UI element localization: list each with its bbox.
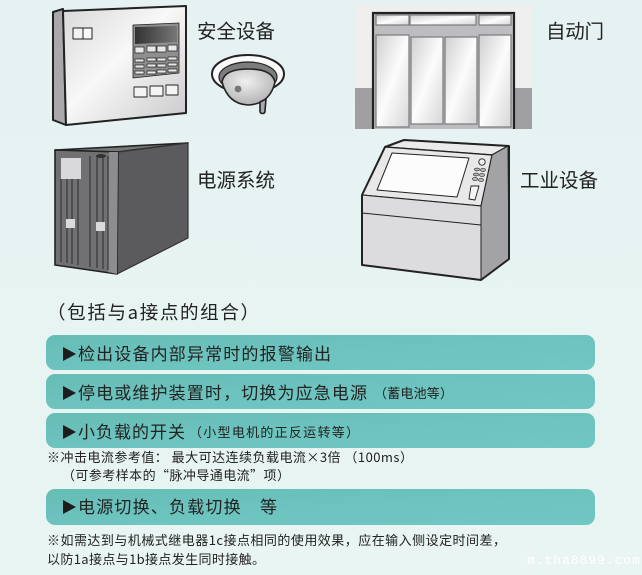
heading: 自动门: 自动门 <box>546 15 604 44</box>
note: 冲击电流: ※冲击电流参考值： 最大可达连续负载电流×3倍 （100ms） <box>47 447 413 466</box>
icon: automatic door <box>355 5 532 129</box>
bar: 小负载的开关: 小负载的开关 <box>78 418 185 443</box>
heading: 电源系统: 电源系统 <box>197 164 275 193</box>
icon: industrial terminal <box>362 140 509 280</box>
note: 时间差 <box>47 530 506 568</box>
heading: 工业设备: 工业设备 <box>520 164 598 193</box>
bar: 应急电源: （蓄电池等） <box>374 383 453 402</box>
note: 冲击电流 <box>47 447 413 484</box>
icon: power supply cabinet <box>55 143 188 274</box>
bar: 电源切换: 电源切换、负载切换 等 <box>78 493 277 518</box>
heading: 安全设备: 安全设备 <box>197 15 275 44</box>
bar: 应急电源: 停电或维护装置时，切换为应急电源 <box>78 379 367 404</box>
bar: 应急电源 <box>46 374 595 409</box>
bar: 报警输出 <box>46 335 595 370</box>
icon: security control panel <box>53 6 186 125</box>
note: 时间差: 以防1a接点与1b接点发生同时接触。 <box>47 549 265 568</box>
watermark: m.tha8899.com <box>527 553 640 568</box>
subheading: 包括与a接点的组合: （包括与a接点的组合） <box>47 299 259 325</box>
icon: dome security camera <box>212 55 284 114</box>
note: 冲击电流: （可参考样本的“脉冲导通电流”项） <box>62 465 290 484</box>
bar: 小负载的开关 <box>46 413 595 448</box>
bar: 电源切换 <box>46 489 595 525</box>
note: 时间差: ※如需达到与机械式继电器1c接点相同的使用效果，应在输入侧设定时间差， <box>47 530 506 549</box>
bar: 报警输出: 检出设备内部异常时的报警输出 <box>78 340 331 365</box>
bar: 小负载的开关: （小型电机的正反运转等） <box>189 422 359 441</box>
